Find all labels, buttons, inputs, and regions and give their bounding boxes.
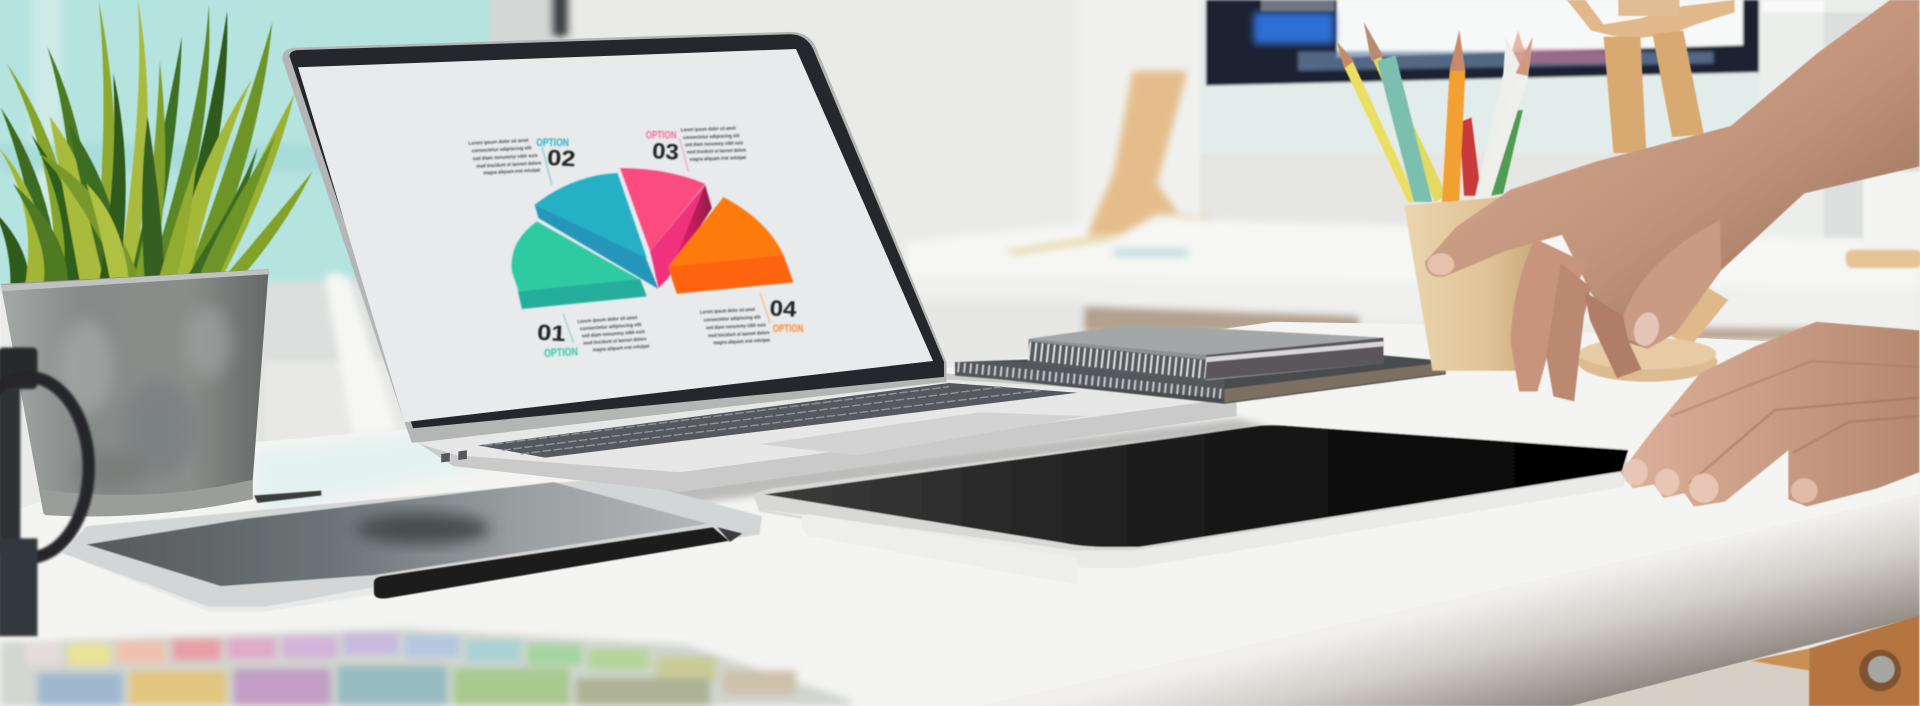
callout 03: sed diam nonummy nibh euis: [685, 140, 744, 148]
middle finger: [1511, 239, 1586, 392]
main white desk top: [1, 322, 1919, 706]
pointing finger tip: [1427, 253, 1454, 275]
upper notebook: [1029, 324, 1383, 381]
white stylus on desk: [801, 515, 1077, 585]
callout 01: OPTION: [544, 346, 578, 360]
callout 04: mod tincidunt ut laoreet dolore: [708, 330, 770, 339]
callout 02: OPTION: [536, 137, 569, 149]
callout 04: Lorem ipsum dolor sit amet: [700, 307, 755, 316]
shadow between laptop and tablets: [613, 418, 1273, 508]
blurred white chair: [325, 273, 398, 438]
notebooks with spiral binding: [955, 324, 1446, 404]
stylus pen: [374, 527, 742, 599]
raised right hand: [1425, 0, 1919, 401]
tablet computer: [753, 425, 1628, 568]
callout 03: mod tincidunt ut laoreet dolore: [687, 148, 746, 156]
callout 02: consectetur adipiscing elit: [472, 145, 532, 154]
keyboard: [478, 383, 1077, 458]
segment 04 orange: [668, 197, 793, 294]
laptop screen: [298, 49, 933, 422]
white mug and wooden coaster, back right: [1846, 171, 1920, 268]
segment 03 pink: [620, 168, 712, 288]
thumb nail: [1630, 309, 1663, 349]
blurred back desk: [906, 220, 1919, 367]
callout 03: [646, 125, 747, 171]
callout 01: sed diam nonummy nibh euis: [582, 329, 645, 339]
callout 04: magna aliquam erat volutpat: [713, 337, 770, 346]
callout 03: OPTION: [646, 130, 676, 142]
blurred desktop monitor: [1200, 0, 1919, 245]
callout 04: sed diam nonummy nibh euis: [706, 322, 766, 331]
callout 04: OPTION: [773, 323, 803, 335]
black coffee mug: [0, 347, 89, 636]
arm and palm: [1425, 0, 1919, 349]
blurred colour swatch fan: [1, 629, 851, 706]
pot base: [41, 480, 253, 516]
callout 02: magna aliquam erat volutpat: [483, 167, 540, 176]
callout 02: sed diam nonummy nibh euis: [473, 153, 538, 162]
graphic drawing tablet: [62, 477, 762, 612]
callout 03: magna aliquam erat volutpat: [689, 155, 746, 163]
usb ports: [441, 450, 467, 463]
second finger: [1546, 263, 1591, 401]
callout 01: [537, 313, 650, 360]
screen lid: [282, 32, 947, 443]
callout 03: consectetur adipiscing elit: [683, 133, 740, 141]
callout 01: Lorem ipsum dolor sit amet: [577, 315, 638, 325]
callout 04: 04: [769, 295, 798, 322]
laptop base: [411, 373, 1237, 492]
callout 01: consectetur adipiscing elit: [580, 322, 642, 332]
resting left hand: [1621, 322, 1919, 507]
third finger: [1584, 291, 1642, 378]
blurred wooden phone stand: [1004, 71, 1222, 257]
wooden artist mannequin: [1567, 0, 1735, 382]
pot rim: [1, 269, 270, 291]
teal window reflection on desk: [252, 434, 490, 514]
callout 01: magna aliquam erat volutpat: [593, 343, 650, 353]
callout 02: 02: [547, 145, 576, 171]
desk front face: [980, 494, 1919, 706]
floor below desk: [1572, 661, 1812, 706]
callout 04: [700, 293, 803, 347]
plant: [0, 0, 313, 516]
callout 01: 01: [537, 320, 566, 346]
pot texture: [59, 306, 231, 491]
segment 02 blue: [535, 173, 659, 289]
callout 01: mod tincidunt ut laoreet dolore: [583, 336, 647, 347]
metal pot: [1, 269, 269, 515]
callout 02: [468, 137, 576, 185]
callout 02: Lorem ipsum dolor sit amet: [468, 138, 529, 147]
trackpad: [759, 412, 1087, 455]
infographic on laptop screen: [468, 125, 803, 360]
segment 01 green: [512, 221, 647, 309]
laptop: [282, 32, 1237, 492]
pencil holder with pencils: [1337, 22, 1540, 371]
callout 02: mod tincidunt ut laoreet dolore: [476, 160, 542, 170]
wooden cup: [1404, 196, 1540, 371]
wooden desk leg with screw: [1750, 615, 1919, 706]
grass blades: [0, 0, 313, 284]
callout 03: 03: [652, 138, 679, 165]
thumb: [1623, 220, 1721, 349]
callout 03: Lorem ipsum dolor sit amet: [681, 126, 736, 134]
callout 04: consectetur adipiscing elit: [704, 315, 761, 324]
lower notebook: [955, 349, 1446, 404]
